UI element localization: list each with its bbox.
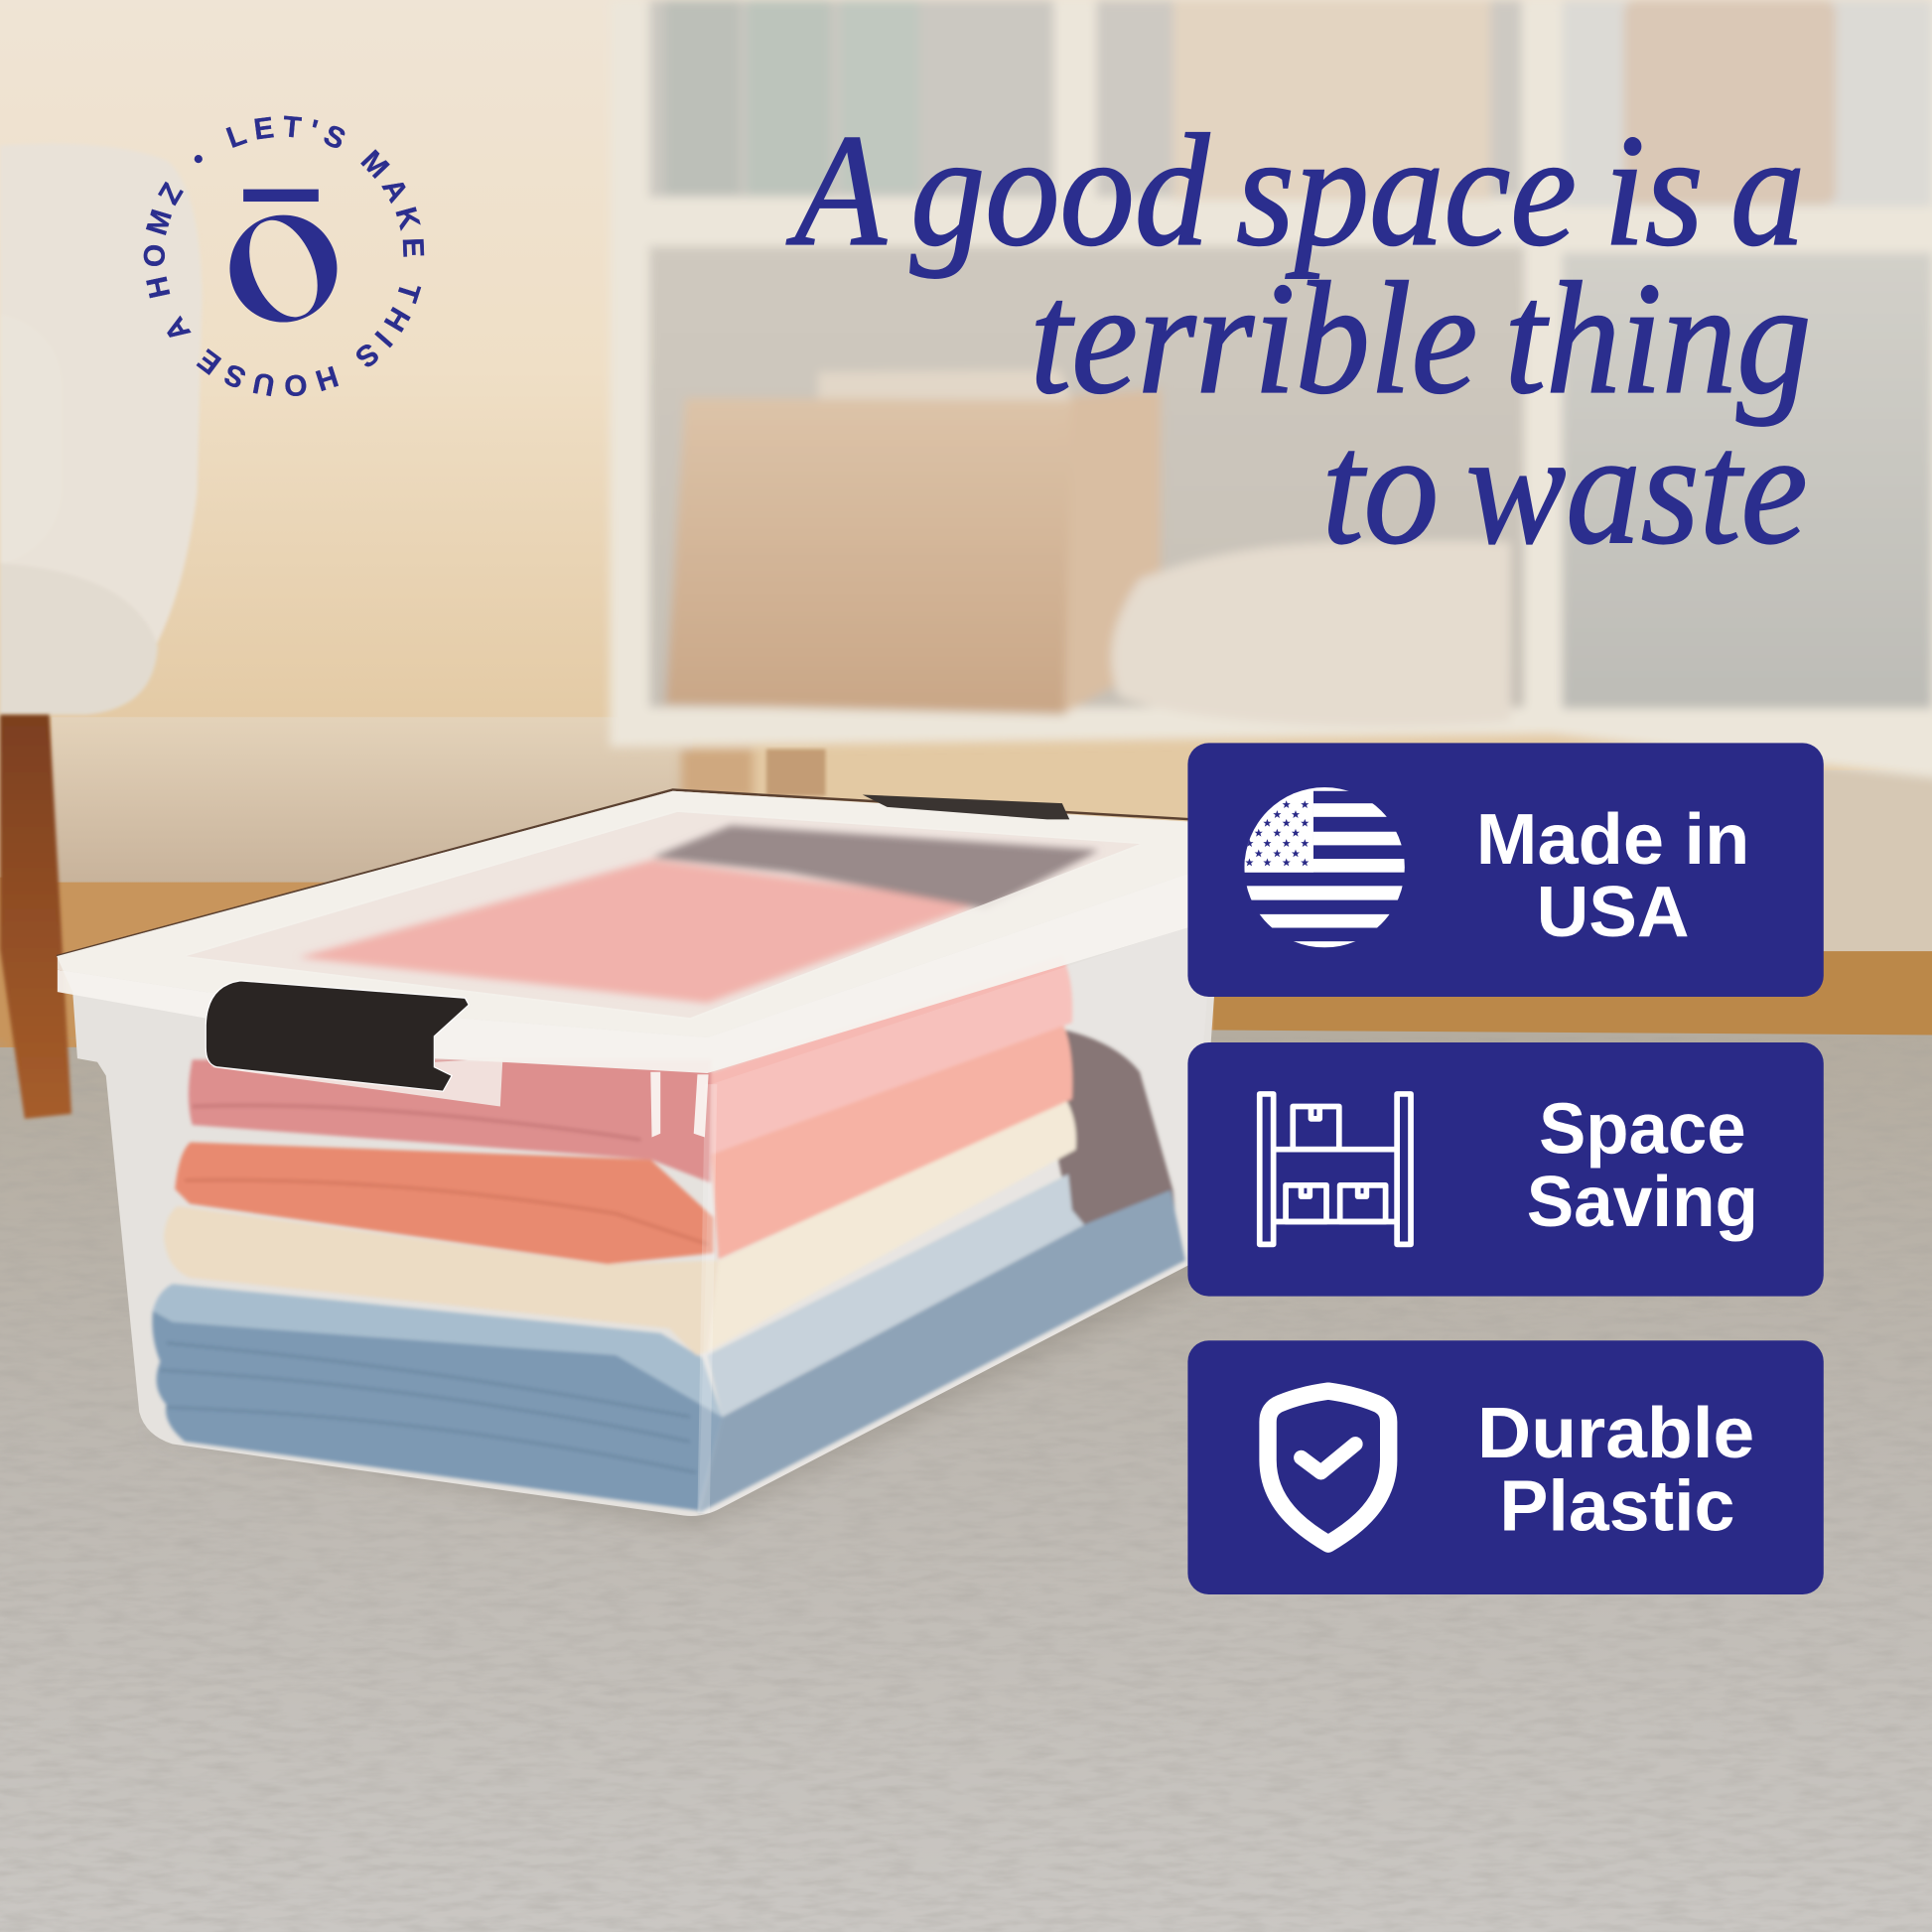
clothes stack [152, 956, 1185, 1513]
latch clip [210, 1058, 502, 1106]
cream side [707, 1099, 1076, 1351]
kraft box wrap [818, 369, 1072, 402]
lid top band [58, 791, 1213, 1037]
interior seen through lid [186, 812, 1140, 1018]
lower cell right [1563, 252, 1932, 709]
shelf unit [610, 0, 1932, 798]
icon: US flag circle [1238, 787, 1412, 947]
dark blue garment side [699, 1190, 1185, 1513]
container body [57, 791, 1220, 1516]
chair seat [0, 563, 158, 715]
label: Space [1539, 1090, 1746, 1170]
label [1477, 1394, 1754, 1546]
cream front [164, 1206, 719, 1355]
lid inner recess [186, 812, 1140, 1018]
card: Durable Plastic [1187, 1340, 1824, 1594]
front latch handle [206, 981, 469, 1091]
headline [786, 101, 1811, 577]
tagline dot [195, 155, 203, 163]
wood floor [0, 878, 1932, 1087]
chair back [0, 144, 203, 649]
logo badge [143, 115, 425, 397]
headline: A good space is a [786, 101, 1805, 279]
upper cell middle [1097, 0, 1522, 198]
right wood floor strip [1213, 951, 1932, 1035]
books [665, 0, 919, 195]
corner edge highlight [697, 1084, 717, 1513]
label: Durable [1477, 1394, 1754, 1473]
lid back shadow line [57, 790, 1213, 956]
wall [0, 0, 1932, 888]
chair leg [0, 715, 71, 1119]
coral front [175, 1142, 714, 1264]
label [1527, 1090, 1758, 1242]
storage container with folded clothes [57, 790, 1220, 1528]
fold lines [160, 1343, 696, 1472]
pink side [711, 956, 1072, 1155]
lid front rim [58, 865, 1220, 1073]
pink fold [193, 1105, 640, 1140]
carpet [0, 1031, 1932, 1932]
logo letter o with macron [229, 190, 337, 323]
armchair [0, 144, 203, 715]
kraft box [665, 398, 1072, 715]
right wall under shelf [1213, 770, 1932, 955]
light blue side [707, 1174, 1084, 1417]
pink garment seen through lid [298, 860, 982, 1003]
second shelf leg [766, 750, 826, 796]
headline: terrible thing [1031, 249, 1811, 427]
dark contents through lid [652, 826, 1099, 909]
label [1476, 800, 1749, 952]
shelf frame [610, 0, 1932, 778]
card: Space Saving [1187, 1042, 1824, 1297]
label: Saving [1527, 1163, 1758, 1242]
pink front [189, 1059, 711, 1182]
icon: shelving with boxes [1260, 1094, 1411, 1244]
upper cell left [649, 0, 1053, 198]
label: Made in [1476, 800, 1749, 880]
label: Plastic [1499, 1466, 1734, 1546]
upper cell right [1563, 0, 1932, 207]
shelf leg [681, 750, 753, 798]
chair arm [0, 314, 62, 564]
light blue front [153, 1284, 722, 1417]
coral side [711, 1023, 1072, 1259]
upper right object [1624, 0, 1836, 205]
rear latch handle [863, 794, 1069, 819]
icon: shield with check [1268, 1391, 1389, 1544]
kraft box side [1062, 389, 1161, 715]
label: USA [1537, 873, 1690, 952]
baseboard [52, 717, 692, 883]
card: Made in USA [1187, 743, 1824, 997]
dark garment at back [1047, 1029, 1176, 1282]
container lid [58, 791, 1220, 1073]
circular tagline: LET'S MAKE THIS HOUSE A HOMZ [143, 115, 425, 397]
carpet texture [0, 1037, 1932, 1932]
clothes seen through lid [298, 826, 1099, 1003]
headline: to waste [1322, 399, 1808, 577]
upper storage box [1173, 0, 1491, 200]
lid tabs [650, 1072, 709, 1138]
dark blue garment front [152, 1311, 722, 1511]
lower cell main [649, 246, 1524, 707]
pillow [1111, 541, 1511, 727]
floor shadow [138, 1232, 1213, 1528]
coral fold [185, 1180, 709, 1244]
translucent side wall [699, 918, 1213, 1514]
